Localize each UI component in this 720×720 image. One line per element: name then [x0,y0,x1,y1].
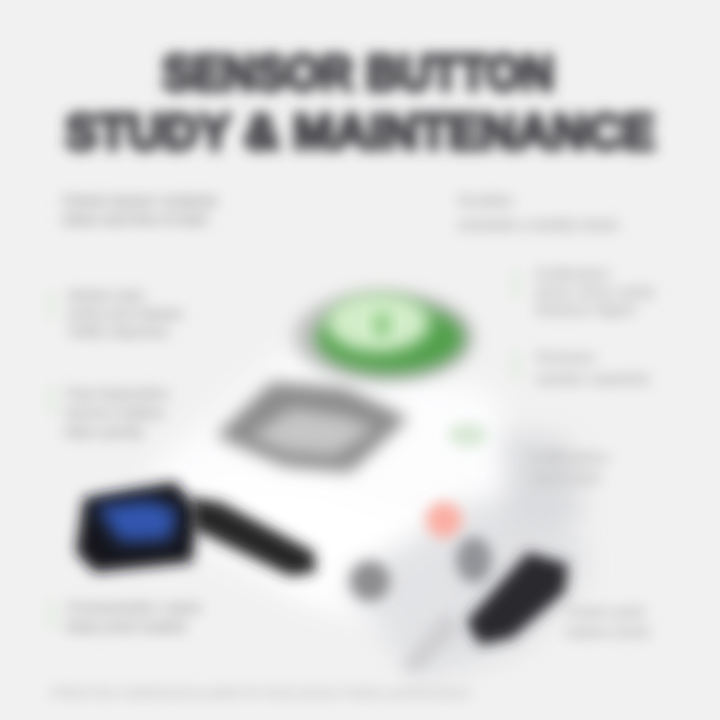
title: STUDY & MAINTENANCE [65,104,655,160]
label: right bottom [565,604,651,639]
label: right top: schedule a weekly check [458,217,619,232]
green accent marks [49,270,518,630]
label: right bottom: Power pack [565,604,646,619]
label: right bottom: replace yearly [565,624,651,639]
label: right second: Indicator [535,266,611,281]
red indicator [426,502,462,538]
label: right top [458,193,619,232]
label: left bottom: keep ports sealed [66,619,186,634]
footer note: Follow the maintenance guide for best sensor button performance [50,685,470,700]
label: right third: Firmware [535,350,595,365]
label: left second [68,288,183,339]
label: left second: Button test [68,288,143,303]
label: right second: green when ready [535,284,656,299]
label: right top: Routine [458,193,513,208]
label: left bottom [66,600,201,634]
label: right fourth: Calibration [530,450,610,465]
label: left third: wipe gently [63,424,145,439]
small grey knob [456,537,492,583]
label: right fourth [530,450,610,485]
label: left second: press and release [68,306,183,321]
label: right second [535,266,656,317]
label: right fourth: reset fault [530,470,600,485]
grey button [350,561,390,601]
label: right second: status light [535,302,636,317]
title: SENSOR BUTTON [162,45,554,101]
dark pill [466,552,568,645]
label: left top: Check sensor contacts [62,193,218,208]
label: left top [62,193,218,227]
dark slot [192,498,316,576]
device body [150,350,590,680]
title [65,45,655,160]
probe [400,612,462,672]
label: left third [63,386,169,439]
label: left third: Tray inspection [64,386,169,401]
label: left bottom: Connector care [66,600,201,615]
grey tray [216,382,408,472]
label: left top: clean and free of dust [62,212,207,227]
label: right third [535,350,651,386]
label: right third: update regularly [535,371,651,386]
green sensor dome [294,291,474,383]
label: left second: verify response [68,324,168,339]
label: left third: remove residue [64,405,164,420]
blue connector [76,482,198,572]
